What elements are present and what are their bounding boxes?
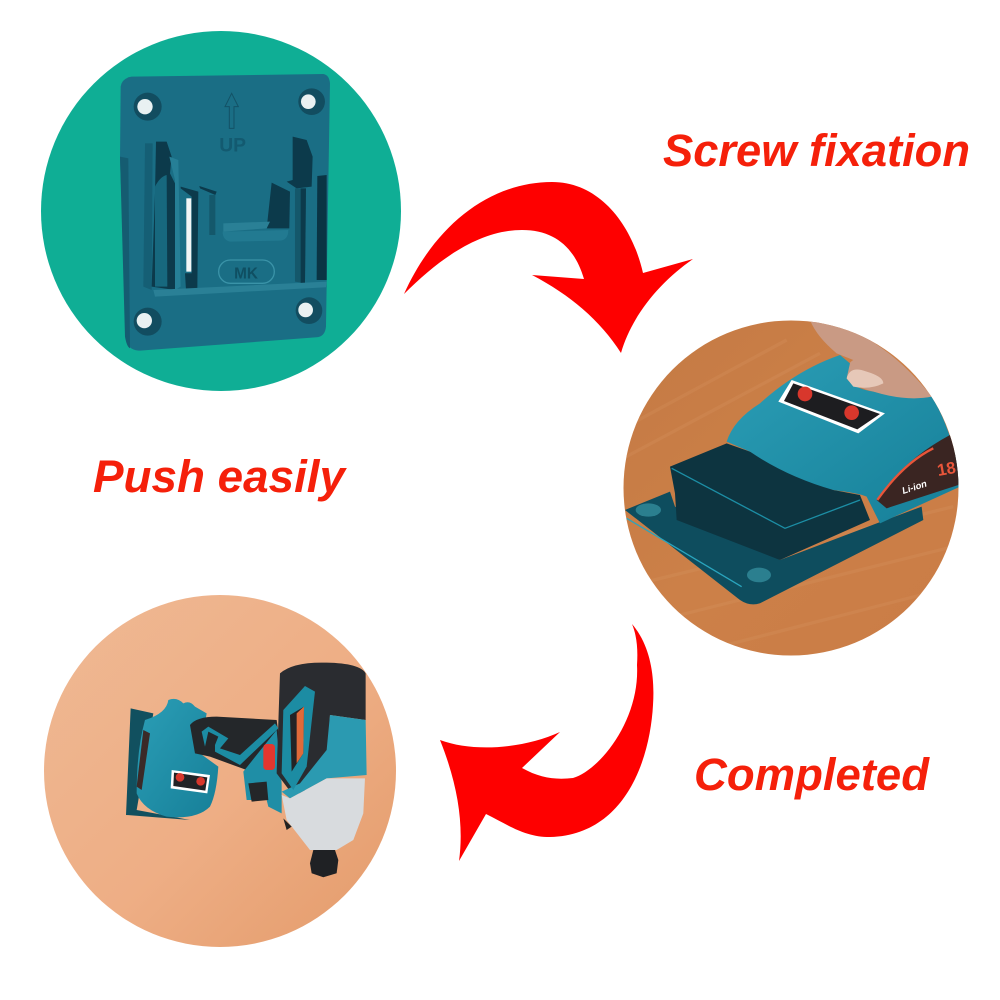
panel: mounting plate photo xyxy=(41,31,401,391)
arrow: plate to adapter xyxy=(404,182,693,353)
hand xyxy=(810,320,933,399)
tool labels: Li-ion xyxy=(901,478,928,496)
panel: pushing tool onto plate photo xyxy=(620,320,965,660)
adapter xyxy=(137,699,218,817)
wall plate xyxy=(126,708,190,820)
heading: completed: Completed xyxy=(694,749,931,800)
tool adapter body xyxy=(727,355,960,523)
arrow: adapter to tool xyxy=(440,624,653,861)
heading: push easily: Push easily xyxy=(93,451,347,502)
heading: screw fixation: Screw fixation xyxy=(663,125,970,176)
chuck xyxy=(282,778,365,850)
tool handle xyxy=(190,717,280,770)
tool head xyxy=(277,663,366,793)
panel: pushing tool onto plate photo: 18 xyxy=(936,458,957,480)
wood background xyxy=(620,320,965,660)
adapter slots xyxy=(670,443,870,560)
teal circle background xyxy=(41,31,401,391)
base plate xyxy=(625,492,923,604)
wood background xyxy=(40,590,400,950)
mounting plate xyxy=(120,74,330,351)
mounting plate: MK xyxy=(234,265,258,282)
plate marks: UP xyxy=(219,136,246,157)
panel: completed wall mounted tool photo xyxy=(40,590,400,950)
